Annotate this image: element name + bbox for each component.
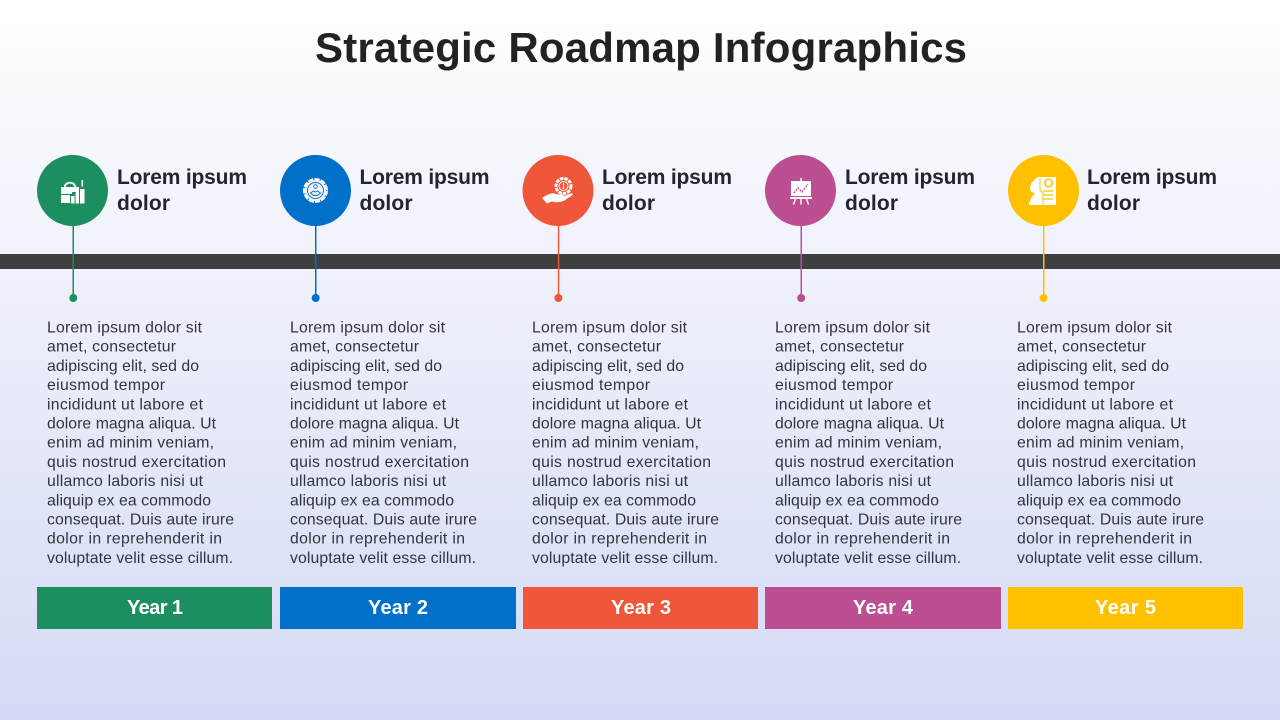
text block: year 5: quis nostrud exercitation [1017,454,1196,471]
heading: year 4: dolor [845,192,898,215]
text block: year 1: ullamco laboris nisi ut [47,473,204,490]
text block: year 2: voluptate velit esse cillum. [290,550,476,567]
text block: year 3: enim ad minim veniam, [532,435,699,452]
year label: year 4: Year 4 [853,597,914,619]
text block: year 3: aliquip ex ea commodo [532,492,696,509]
stem and dot: year 4 [797,224,805,302]
text block: year 5: aliquip ex ea commodo [1017,492,1181,509]
panel: year 4 [765,155,1001,629]
heading: year 3: dolor [602,192,655,215]
text block: year 2: dolor in reprehenderit in [290,531,465,548]
heading: year 2: Lorem ipsum [360,166,490,189]
text block: year 4: quis nostrud exercitation [775,454,954,471]
year label: year 1: Year 1 [127,597,183,619]
text block: year 5: consequat. Duis aute irure [1017,512,1204,528]
year label: year 3 [523,587,758,629]
text block: year 2: aliquip ex ea commodo [290,492,454,509]
text block: year 1: eiusmod tempor [47,377,165,394]
heading: year 4: Lorem ipsum [845,166,975,189]
text block: year 5: eiusmod tempor [1017,377,1135,394]
heading: year 2 [360,166,490,215]
icon circle: document with chess knight and dollar [1008,155,1079,226]
text block: year 5: ullamco laboris nisi ut [1017,473,1174,490]
text block: year 1: incididunt ut labore et [47,396,204,413]
text block: year 5: voluptate velit esse cillum. [1017,550,1203,567]
text block: year 1: dolore magna aliqua. Ut [47,416,217,432]
text block: year 3 [532,320,719,567]
stem and dot: year 3 [554,224,562,302]
text block: year 1: voluptate velit esse cillum. [47,550,233,567]
heading: year 5: dolor [1087,192,1140,215]
text block: year 1: dolor in reprehenderit in [47,531,222,548]
title: Strategic Roadmap Infographics [315,24,967,71]
text block: year 2: ullamco laboris nisi ut [290,473,447,490]
panel: year 3 [522,155,758,629]
text block: year 2: Lorem ipsum dolor sit [290,320,446,336]
year label: year 2: Year 2 [368,597,428,619]
text block: year 4: aliquip ex ea commodo [775,492,939,509]
panel: year 1 [37,155,272,629]
text block: year 3: voluptate velit esse cillum. [532,550,718,567]
panel: year 5 [1008,155,1243,629]
icon circle: presentation board [765,155,836,226]
heading: year 1: Lorem ipsum [117,166,247,189]
text block: year 1: aliquip ex ea commodo [47,492,211,509]
text block: year 2: consequat. Duis aute irure [290,512,477,528]
text block: year 1: Lorem ipsum dolor sit [47,320,203,336]
heading: year 1: dolor [117,192,170,215]
text block: year 3: Lorem ipsum dolor sit [532,320,688,336]
stem and dot: year 1 [69,224,77,302]
text block: year 1: enim ad minim veniam, [47,435,214,452]
text block: year 2: adipiscing elit, sed do [290,358,442,375]
text block: year 4: eiusmod tempor [775,377,893,394]
text block: year 1 [47,320,234,567]
text block: year 1: amet, consectetur [47,339,176,356]
year label: year 4 [765,587,1001,629]
heading: year 4 [845,166,975,215]
icon circle: hand holding gear with dollar [522,155,594,226]
text block: year 5: incididunt ut labore et [1017,396,1174,413]
text block: year 3: dolore magna aliqua. Ut [532,416,702,432]
text block: year 2: eiusmod tempor [290,377,408,394]
text block: year 1: consequat. Duis aute irure [47,512,234,528]
timeline bar [0,254,1280,269]
year label: year 5 [1008,587,1243,629]
heading: year 3: Lorem ipsum [602,166,732,189]
icon circle: briefcase and growth bars [37,155,108,226]
text block: year 4: ullamco laboris nisi ut [775,473,932,490]
text block: year 3: incididunt ut labore et [532,396,689,413]
text block: year 4: incididunt ut labore et [775,396,932,413]
icon circle: gear with handshake [280,155,351,226]
text block: year 3: ullamco laboris nisi ut [532,473,689,490]
text block: year 4: voluptate velit esse cillum. [775,550,961,567]
year label: year 3: Year 3 [611,597,671,619]
text block: year 2: incididunt ut labore et [290,396,447,413]
text block: year 3: consequat. Duis aute irure [532,512,719,528]
text block: year 1: adipiscing elit, sed do [47,358,199,375]
text block: year 4: Lorem ipsum dolor sit [775,320,931,336]
text block: year 3: dolor in reprehenderit in [532,531,707,548]
text block: year 4: adipiscing elit, sed do [775,358,927,375]
text block: year 3: adipiscing elit, sed do [532,358,684,375]
text block: year 5: dolor in reprehenderit in [1017,531,1192,548]
text block: year 5: adipiscing elit, sed do [1017,358,1169,375]
text block: year 3: eiusmod tempor [532,377,650,394]
text block: year 2 [290,320,477,567]
text block: year 4 [775,320,962,567]
text block: year 4: dolore magna aliqua. Ut [775,416,945,432]
text block: year 4: consequat. Duis aute irure [775,512,962,528]
text block: year 4: amet, consectetur [775,339,904,356]
text block: year 5: Lorem ipsum dolor sit [1017,320,1173,336]
text block: year 5 [1017,320,1204,567]
text block: year 4: dolor in reprehenderit in [775,531,950,548]
text block: year 1: quis nostrud exercitation [47,454,226,471]
stem and dot: year 2 [312,224,320,302]
year label: year 1 [37,587,272,629]
heading: year 5 [1087,166,1217,215]
text block: year 2: amet, consectetur [290,339,419,356]
text block: year 2: dolore magna aliqua. Ut [290,416,460,432]
text block: year 3: amet, consectetur [532,339,661,356]
heading: year 3 [602,166,732,215]
heading: year 1 [117,166,247,215]
text block: year 2: quis nostrud exercitation [290,454,469,471]
year label: year 5: Year 5 [1095,597,1156,619]
text block: year 5: dolore magna aliqua. Ut [1017,416,1187,432]
heading: year 5: Lorem ipsum [1087,166,1217,189]
text block: year 4: enim ad minim veniam, [775,435,942,452]
panel: year 2 [280,155,516,629]
text block: year 3: quis nostrud exercitation [532,454,711,471]
stem and dot: year 5 [1040,224,1048,302]
heading: year 2: dolor [360,192,412,215]
text block: year 5: amet, consectetur [1017,339,1146,356]
year label: year 2 [280,587,516,629]
text block: year 2: enim ad minim veniam, [290,435,457,452]
text block: year 5: enim ad minim veniam, [1017,435,1184,452]
